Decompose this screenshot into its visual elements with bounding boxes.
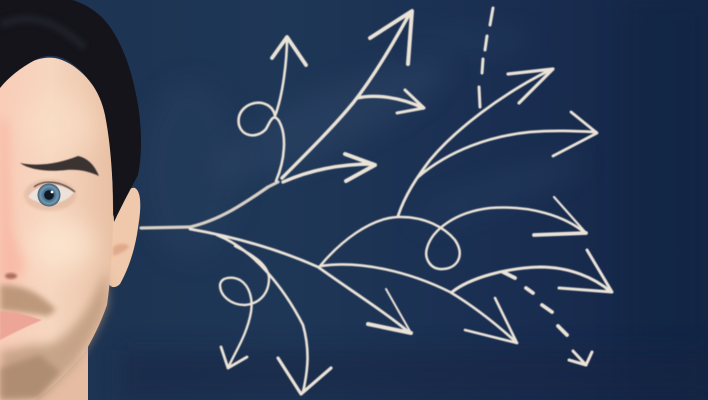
eyebrow [20, 156, 99, 176]
arrow: main lower branch [190, 229, 411, 333]
ear [107, 188, 140, 287]
hair [0, 0, 141, 222]
stubble: moustache and beard [0, 270, 107, 400]
dashed line down [479, 8, 493, 107]
stem line from ear [141, 182, 278, 228]
chalk arrows [141, 8, 612, 394]
arrow: loop down left [220, 246, 269, 368]
nose [0, 115, 24, 282]
man's face [0, 0, 141, 400]
dashed arrow to lower right [503, 272, 592, 365]
eye [24, 179, 76, 211]
arrow: arc to lower right [321, 264, 517, 343]
arrow: far right arc [452, 250, 612, 292]
arrow: arc with loop to right [320, 197, 586, 269]
forehead and cheek light [24, 95, 96, 155]
arrow: long up right [282, 11, 412, 178]
arrow: short branch right [357, 90, 424, 113]
arrow: arc to upper right [398, 69, 553, 216]
neck [30, 340, 88, 400]
arrow: lower branch right [283, 154, 375, 182]
face skin [0, 58, 113, 400]
lips [0, 311, 42, 340]
arrow: arc to right [418, 112, 597, 177]
arrow: looping up [239, 37, 306, 181]
arrow: long curve down [217, 235, 331, 394]
